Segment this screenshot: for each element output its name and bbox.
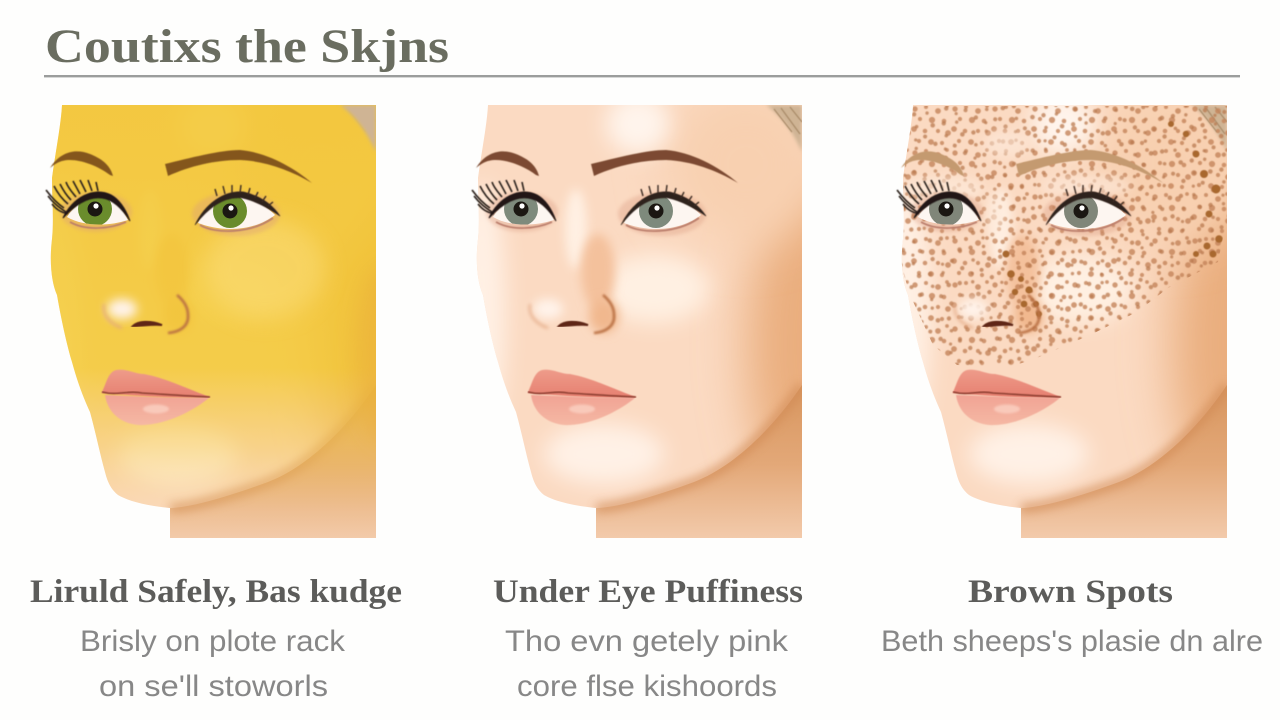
description: under eye puffiness: Tho evn getely pink xyxy=(505,625,789,658)
heading: under eye puffiness: Under Eye Puffiness xyxy=(493,574,803,610)
description: yellow skin: on se'll stoworls xyxy=(99,670,328,703)
description: under eye puffiness xyxy=(505,625,789,703)
heading: brown spots: Brown Spots xyxy=(968,574,1173,610)
illustration: natural face xyxy=(458,84,886,544)
freckle field xyxy=(902,106,1227,366)
description: yellow skin: Brisly on plote rack xyxy=(80,625,346,658)
description: under eye puffiness: core flse kishoords xyxy=(517,670,777,703)
heading: yellow skin: Liruld Safely, Bas kudge xyxy=(30,574,402,610)
illustration: jaundiced face xyxy=(44,105,376,538)
panel: brown spots xyxy=(881,84,1280,658)
description: yellow skin xyxy=(80,625,346,703)
description: brown spots: Beth sheeps's plasie dn alre xyxy=(881,625,1263,658)
panel: under eye puffiness xyxy=(458,84,886,703)
light patches around eyes and nose xyxy=(908,130,1131,236)
title: Coutixs the Skjns xyxy=(45,20,449,73)
panel: yellow skin xyxy=(30,105,402,696)
illustration: freckled face xyxy=(896,105,1227,538)
